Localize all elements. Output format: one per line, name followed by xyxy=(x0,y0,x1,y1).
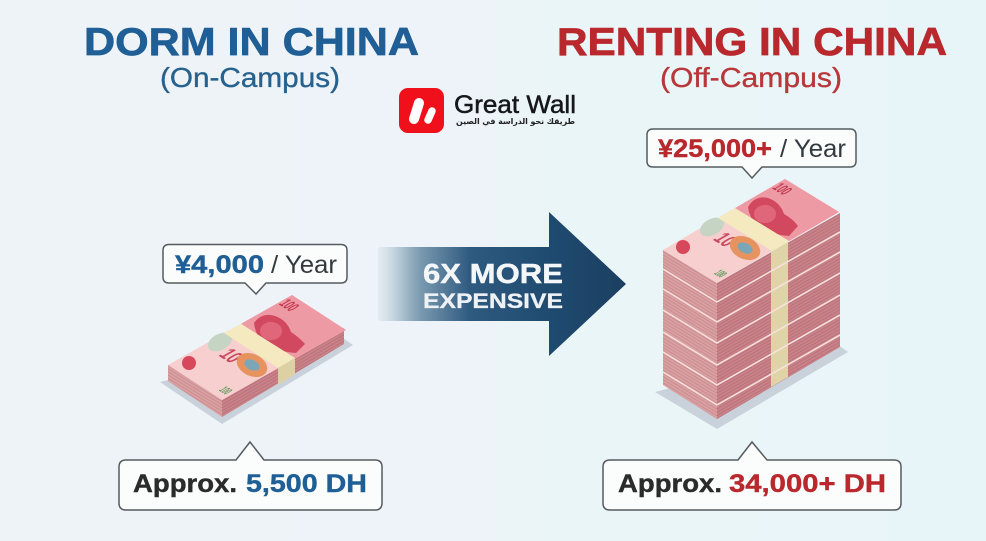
panel: renting in China xyxy=(557,21,947,510)
arrow: 6x more expensive xyxy=(378,212,626,356)
large banknote stack: 10 xyxy=(708,229,743,250)
approx callout: dorm: Approx. xyxy=(133,470,237,498)
small banknote stack: 100 xyxy=(215,385,235,397)
price callout: renting xyxy=(647,129,856,178)
small banknote stack: 100 xyxy=(275,296,304,314)
approx callout: renting: 34,000+ DH xyxy=(729,470,886,498)
large banknote stack: 100 xyxy=(768,180,797,197)
large banknote stack xyxy=(655,179,848,429)
arrow: 6x more expensive: EXPENSIVE xyxy=(423,290,563,313)
logo: Great Wall: Great Wall xyxy=(454,91,576,119)
approx callout: dorm xyxy=(119,442,382,510)
price callout: dorm xyxy=(163,244,347,294)
price callout: renting: / Year xyxy=(780,135,846,163)
logo: Great Wall xyxy=(399,88,576,133)
price callout: dorm: ¥4,000 xyxy=(175,251,264,279)
approx callout: dorm: 5,500 DH xyxy=(246,470,367,498)
approx callout: renting: Approx. xyxy=(618,470,722,498)
panel: dorm in China xyxy=(84,21,419,510)
price callout: dorm: / Year xyxy=(271,251,337,279)
subheading: on-campus: (On-Campus) xyxy=(160,62,340,93)
arrow: 6x more expensive: 6X MORE xyxy=(423,258,563,289)
heading: dorm: DORM IN CHINA xyxy=(84,21,419,64)
subheading: off-campus: (Off-Campus) xyxy=(660,62,842,93)
small banknote stack: 10 xyxy=(213,345,249,366)
large banknote stack: 100 xyxy=(710,268,730,280)
approx callout: renting xyxy=(603,442,901,510)
heading: renting: RENTING IN CHINA xyxy=(557,21,947,64)
price callout: renting: ¥25,000+ xyxy=(658,135,772,163)
small banknote stack xyxy=(160,295,353,424)
logo: Great Wall: طريقك نحو الدراسة في الصين xyxy=(456,117,575,126)
